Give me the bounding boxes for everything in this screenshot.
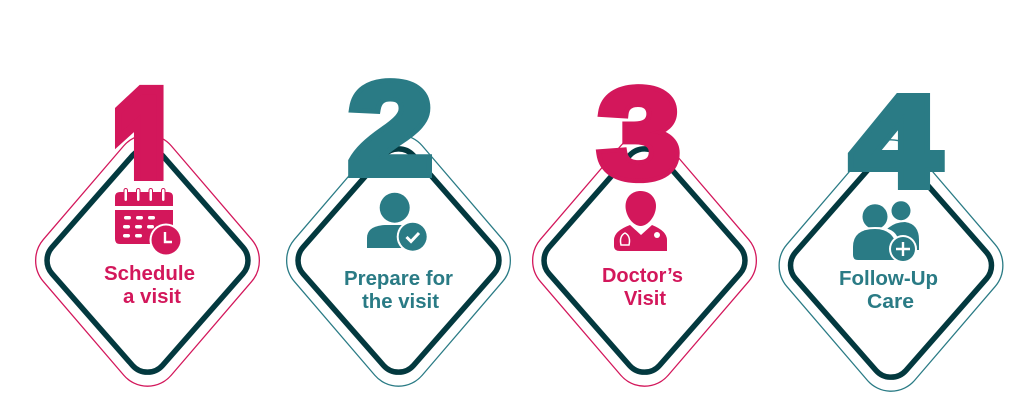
panel: step 4 follow-up care bbox=[779, 70, 1003, 391]
label: Follow-Up Care bbox=[839, 268, 938, 313]
diamond frame 1 bbox=[36, 135, 259, 386]
diamond frame 2 bbox=[287, 135, 510, 386]
number 1: 1 bbox=[114, 60, 178, 245]
number 4: 4 bbox=[851, 70, 940, 213]
label: Schedule a visit bbox=[104, 263, 195, 308]
label: Follow-Up Care: Follow-Up bbox=[839, 268, 938, 290]
icon: person with check bbox=[367, 193, 429, 253]
number 3: 3 bbox=[598, 64, 680, 205]
panel: step 2 prepare for the visit bbox=[287, 56, 510, 386]
label: Doctor's Visit: Doctor’s bbox=[602, 265, 683, 287]
label: Prepare for the visit bbox=[344, 268, 453, 313]
number 2: 2 bbox=[348, 56, 433, 201]
icon: calendar with clock bbox=[115, 188, 182, 256]
icon: doctor with stethoscope bbox=[614, 191, 667, 251]
label: Schedule a visit: a visit bbox=[123, 286, 181, 308]
label: Schedule a visit: Schedule bbox=[104, 263, 195, 285]
panel: step 3 doctor's visit bbox=[533, 64, 756, 386]
diamond frame 4 bbox=[779, 140, 1003, 391]
label: Prepare for the visit: Prepare for bbox=[344, 268, 453, 290]
icon: two people with plus bbox=[851, 201, 919, 263]
diamond frame 3 bbox=[533, 135, 756, 386]
label: Doctor's Visit bbox=[602, 265, 683, 310]
panel: step 1 schedule a visit bbox=[36, 60, 259, 386]
label: Prepare for the visit: the visit bbox=[362, 291, 439, 313]
label: Follow-Up Care: Care bbox=[867, 291, 914, 313]
label: Doctor's Visit: Visit bbox=[624, 288, 666, 310]
